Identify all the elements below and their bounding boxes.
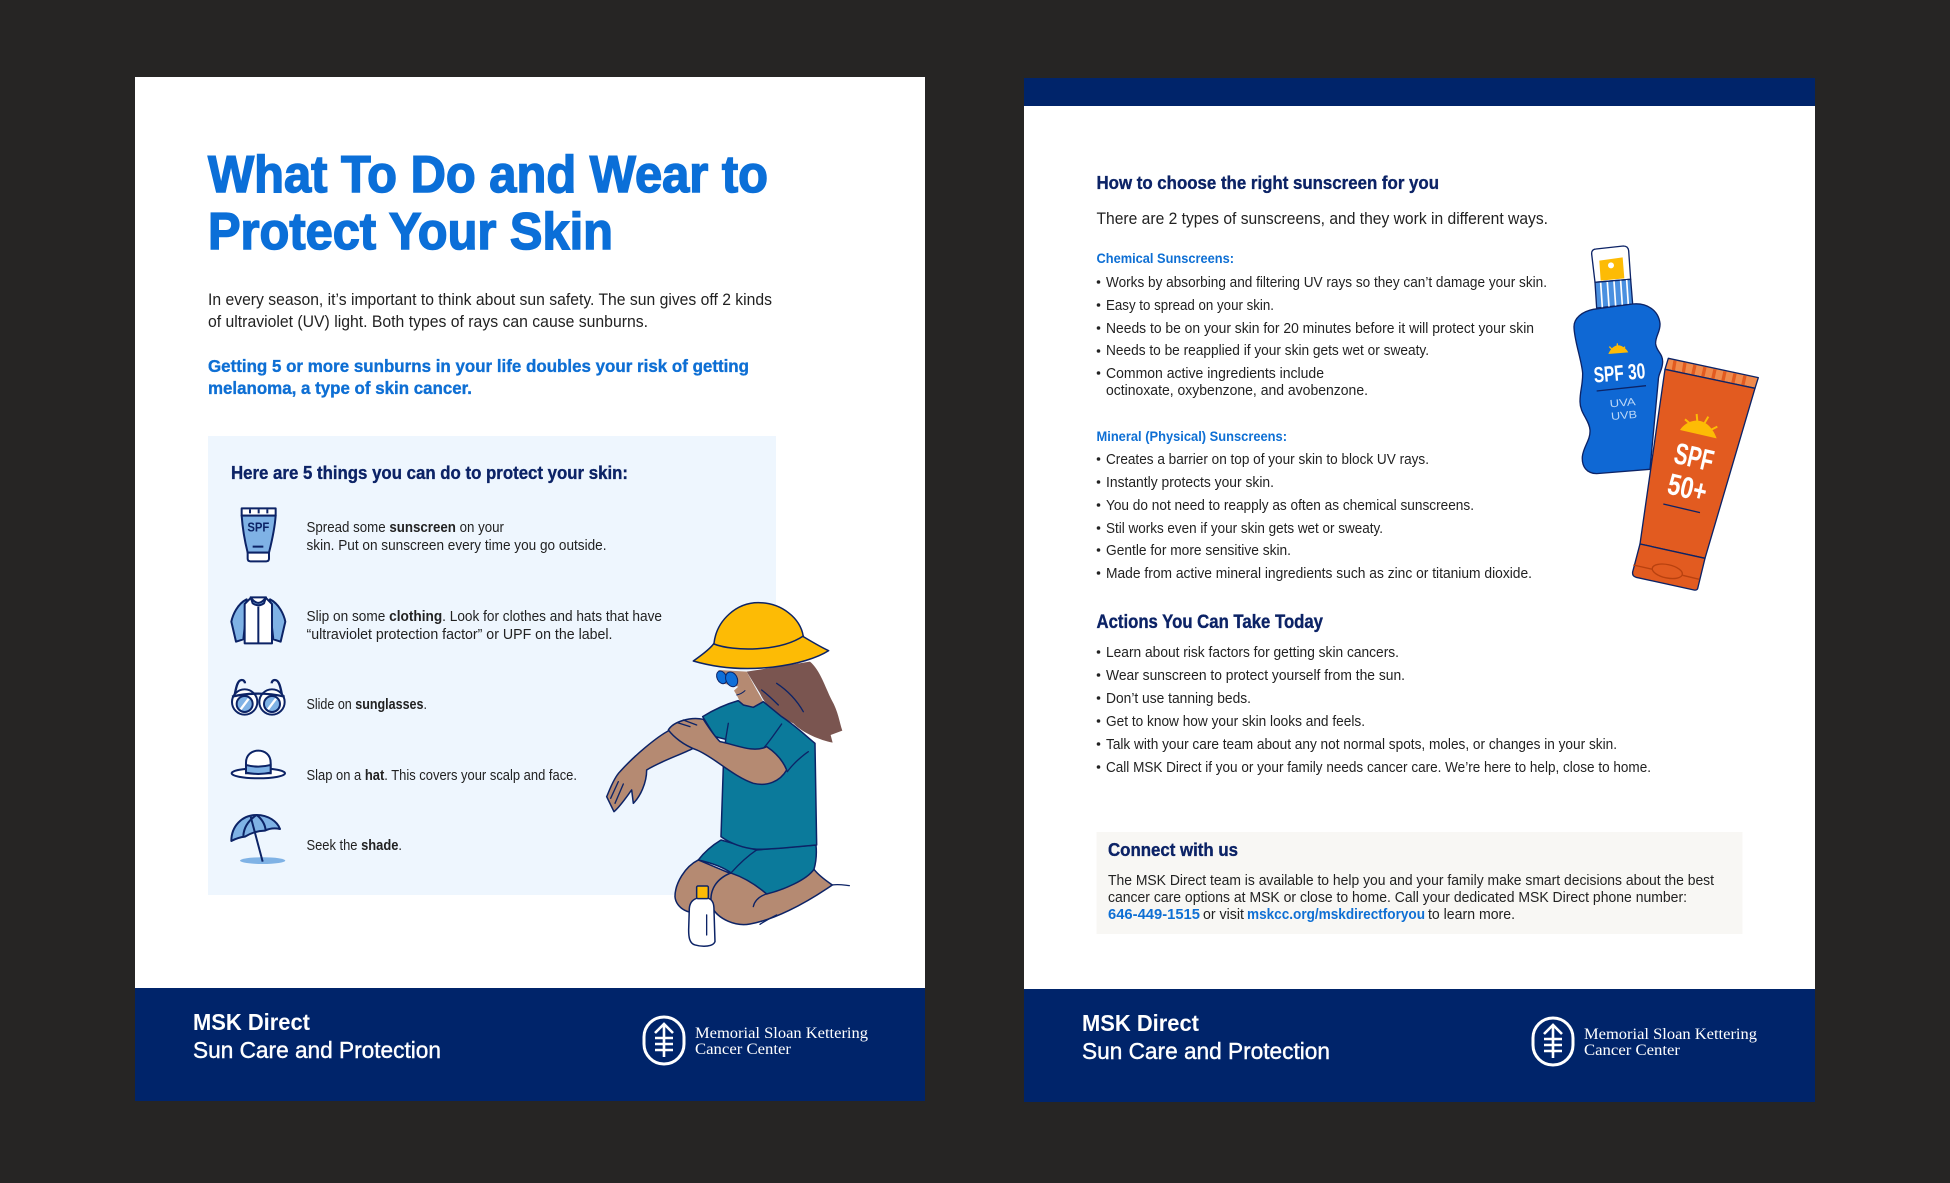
top bar bbox=[1024, 78, 1815, 106]
item text: sunscreen: skin. Put on sunscreen every time you go outside. bbox=[306, 538, 606, 554]
list: mineral sunscreens bbox=[1096, 428, 1532, 582]
list: chemical sunscreens bbox=[1096, 250, 1547, 399]
panel: connect with us: Connect with us bbox=[1108, 840, 1238, 860]
list: mineral sunscreens: Creates a barrier on top of your skin to block UV rays. bbox=[1106, 452, 1429, 468]
list: chemical sunscreens: Easy to spread on your skin. bbox=[1106, 298, 1274, 314]
list: mineral sunscreens: Mineral (Physical) Sunscreens: bbox=[1096, 428, 1287, 444]
list: actions: Call MSK Direct if you or your family needs cancer care. We’re here to help, close to home. bbox=[1106, 760, 1651, 776]
logo wordmark bbox=[1584, 1026, 1757, 1059]
callout: melanoma risk: melanoma, a type of skin cancer. bbox=[208, 378, 472, 398]
logo wordmark: Cancer Center bbox=[695, 1041, 792, 1058]
panel: connect with us bbox=[1096, 832, 1742, 934]
logo wordmark: Cancer Center bbox=[1584, 1042, 1681, 1059]
list: mineral sunscreens: You do not need to reapply as often as chemical sunscreens. bbox=[1106, 498, 1474, 514]
panel: connect with us: or visit bbox=[1203, 907, 1244, 923]
icon: orange tube: SPF bbox=[1671, 437, 1717, 478]
icon: orange tube bbox=[1633, 358, 1758, 590]
list: chemical sunscreens: Needs to be reapplied if your skin gets wet or sweaty. bbox=[1106, 343, 1429, 359]
footer: left page: Sun Care and Protection bbox=[193, 1037, 441, 1063]
logo wordmark bbox=[695, 1025, 868, 1058]
item text: clothing: Slip on some clothing. Look for clothes and hats that have bbox=[306, 609, 662, 625]
panel: 5 things bbox=[208, 436, 776, 895]
icon: blue spray bottle: UVB bbox=[1611, 409, 1637, 423]
footer: right page: MSK Direct bbox=[1082, 1010, 1199, 1036]
panel: connect with us: 646-449-1515 bbox=[1108, 907, 1200, 923]
illustration: girl applying sunscreen bbox=[607, 603, 849, 946]
icon: beach umbrella bbox=[231, 815, 285, 864]
icon: blue spray bottle: UVA bbox=[1609, 396, 1637, 410]
icon: jacket bbox=[231, 597, 285, 643]
item text: hat: Slap on a hat. This covers your scalp and face. bbox=[306, 768, 577, 784]
icon: blue spray bottle bbox=[1574, 246, 1663, 474]
logo: MSK tree mark bbox=[1533, 1018, 1573, 1065]
heading: actions: Actions You Can Take Today bbox=[1096, 612, 1323, 633]
list: chemical sunscreens: Needs to be on your skin for 20 minutes before it will protect your skin bbox=[1106, 321, 1534, 337]
list: actions: Learn about risk factors for getting skin cancers. bbox=[1106, 645, 1399, 661]
item text: clothing: “ultraviolet protection factor” or UPF on the label. bbox=[306, 627, 612, 643]
panel heading: Here are 5 things you can do to protect your skin: bbox=[231, 463, 628, 483]
list: chemical sunscreens: octinoxate, oxybenzone, and avobenzone. bbox=[1106, 383, 1368, 399]
panel: left page bbox=[135, 77, 925, 1101]
intro text: In every season, it’s important to think about sun safety. The sun gives off 2 kinds bbox=[208, 291, 772, 309]
panel: connect with us: to learn more. bbox=[1428, 907, 1515, 923]
logo: MSK tree mark bbox=[644, 1017, 684, 1064]
intro sentence: There are 2 types of sunscreens, and they work in different ways. bbox=[1096, 209, 1548, 228]
title bbox=[208, 146, 768, 261]
list: mineral sunscreens: Gentle for more sensitive skin. bbox=[1106, 543, 1291, 559]
item text: sunglasses: Slide on sunglasses. bbox=[306, 697, 427, 713]
panel: connect with us: The MSK Direct team is available to help you and your family make smart decisions about the best bbox=[1108, 873, 1714, 889]
item text: sunscreen: Spread some sunscreen on your bbox=[306, 520, 504, 536]
intro text: of ultraviolet (UV) light. Both types of rays can cause sunburns. bbox=[208, 313, 648, 331]
callout: melanoma risk bbox=[208, 356, 749, 398]
panel: connect with us: cancer care options at MSK or close to home. Call your dedicated MSK Direct phone number: bbox=[1108, 890, 1687, 906]
icon: orange tube: 50+ bbox=[1664, 468, 1710, 509]
footer: right page bbox=[1024, 989, 1815, 1102]
list: actions: Get to know how your skin looks and feels. bbox=[1106, 714, 1365, 730]
list: mineral sunscreens: Instantly protects your skin. bbox=[1106, 475, 1274, 491]
list: actions: Don’t use tanning beds. bbox=[1106, 691, 1251, 707]
list: actions: Wear sunscreen to protect yourself from the sun. bbox=[1106, 668, 1405, 684]
footer: left page bbox=[135, 988, 925, 1101]
list: chemical sunscreens: Works by absorbing and filtering UV rays so they can’t damage your skin. bbox=[1106, 275, 1547, 291]
item text: shade: Seek the shade. bbox=[306, 838, 402, 854]
footer: right page: Sun Care and Protection bbox=[1082, 1038, 1330, 1064]
icon: sunglasses bbox=[232, 680, 285, 715]
item text: sunscreen bbox=[306, 520, 606, 554]
list: actions bbox=[1097, 645, 1651, 776]
heading: how to choose: How to choose the right sunscreen for you bbox=[1096, 173, 1439, 193]
list: chemical sunscreens: Chemical Sunscreens: bbox=[1096, 250, 1234, 266]
intro text bbox=[208, 291, 772, 331]
list: mineral sunscreens: Made from active mineral ingredients such as zinc or titanium dioxide. bbox=[1106, 566, 1532, 582]
illustration: sunscreen bottles bbox=[1574, 246, 1758, 590]
logo wordmark: Memorial Sloan Kettering bbox=[1584, 1026, 1757, 1043]
panel: right page bbox=[1024, 78, 1815, 1102]
title: What To Do and Wear to bbox=[208, 146, 768, 204]
icon: hat bbox=[232, 751, 285, 778]
icon: blue spray bottle: SPF 30 bbox=[1593, 358, 1646, 388]
footer: left page: MSK Direct bbox=[193, 1009, 310, 1035]
item text: clothing bbox=[306, 609, 662, 643]
title: Protect Your Skin bbox=[208, 203, 613, 261]
icon: sunscreen tube bbox=[242, 508, 276, 561]
list: mineral sunscreens: Stil works even if your skin gets wet or sweaty. bbox=[1106, 521, 1383, 537]
callout: melanoma risk: Getting 5 or more sunburns in your life doubles your risk of getting bbox=[208, 356, 749, 376]
list: chemical sunscreens: Common active ingredients include bbox=[1106, 366, 1324, 382]
icon: sunscreen tube: SPF bbox=[247, 520, 269, 535]
list: actions: Talk with your care team about any not normal spots, moles, or changes in your skin. bbox=[1106, 737, 1617, 753]
panel: connect with us: mskcc.org/mskdirectforyou bbox=[1247, 907, 1425, 923]
logo wordmark: Memorial Sloan Kettering bbox=[695, 1025, 868, 1042]
